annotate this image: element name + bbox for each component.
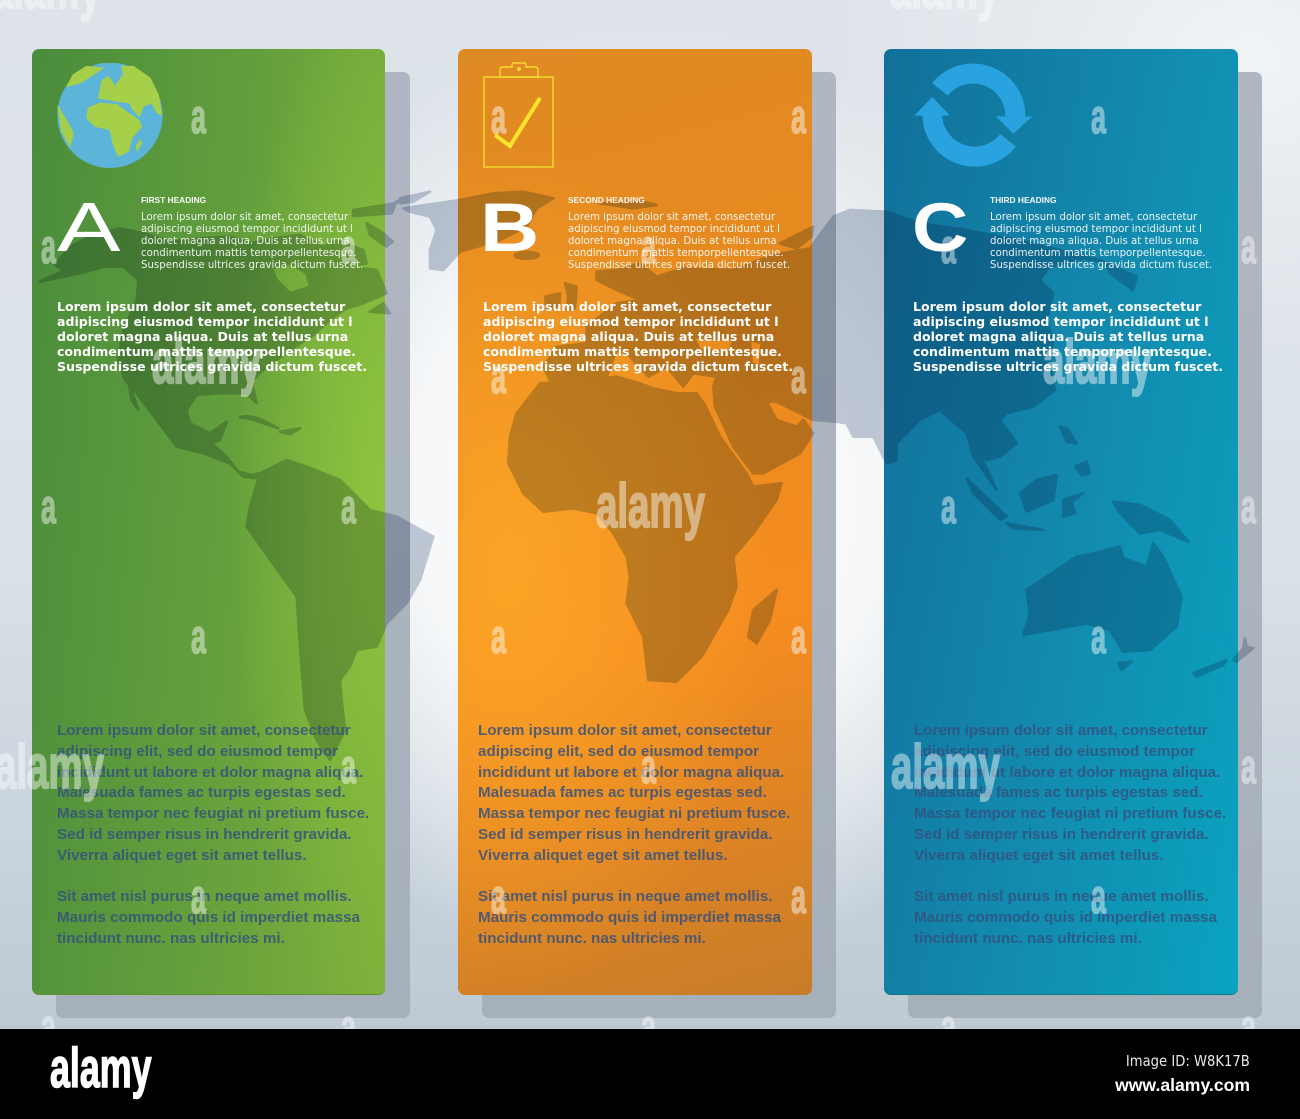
shadow: panel B — [482, 72, 836, 1018]
icon: clipboard with check — [483, 62, 554, 168]
watermarks: a — [791, 351, 806, 404]
watermarks: a — [341, 741, 356, 794]
lower paragraph: incididunt ut labore et dolor magna aliqua. — [914, 764, 1220, 781]
bold paragraph: doloret magna aliqua. Duis at tellus urna — [483, 329, 774, 344]
bold paragraph: adipiscing eiusmod tempor incididunt ut l — [913, 314, 1209, 329]
watermarks: a — [941, 221, 956, 274]
letter B: B — [480, 189, 539, 266]
lower paragraph: Viverra aliquet eget sit amet tellus. — [478, 847, 728, 864]
bold paragraph: Suspendisse ultrices gravida dictum fuscet. — [57, 359, 367, 374]
small paragraph — [568, 212, 790, 271]
lower paragraph: Massa tempor nec feugiat ni pretium fusce. — [914, 805, 1226, 822]
small paragraph: doloret magna aliqua. Duis at tellus urna — [568, 236, 777, 247]
letter A: A — [57, 187, 121, 266]
watermarks: a — [1091, 611, 1106, 664]
lower paragraph: Viverra aliquet eget sit amet tellus. — [57, 847, 307, 864]
small paragraph: condimentum mattis temporpellentesque. — [568, 248, 784, 259]
bold paragraph: Suspendisse ultrices gravida dictum fuscet. — [483, 359, 793, 374]
bold paragraph — [57, 299, 367, 374]
panel: A background — [32, 49, 385, 995]
watermarks: a — [791, 91, 806, 144]
lower paragraph: Mauris commodo quis id imperdiet massa — [478, 909, 781, 926]
lower paragraph: Mauris commodo quis id imperdiet massa — [57, 909, 360, 926]
small paragraph: Suspendisse ultrices gravida dictum fuscet. — [568, 260, 790, 271]
watermarks: a — [491, 611, 506, 664]
watermarks: alamy — [891, 732, 1000, 801]
bold paragraph: Lorem ipsum dolor sit amet, consectetur — [57, 299, 345, 314]
lower paragraph: Sed id semper risus in hendrerit gravida. — [914, 826, 1209, 843]
bold paragraph: adipiscing eiusmod tempor incididunt ut l — [57, 314, 353, 329]
lower paragraph — [478, 722, 790, 947]
second heading: SECOND HEADING — [568, 195, 645, 205]
watermarks: a — [941, 481, 956, 534]
bold paragraph — [913, 299, 1223, 374]
watermarks: a — [341, 221, 356, 274]
icon: refresh arrows — [914, 64, 1032, 167]
bold paragraph: Lorem ipsum dolor sit amet, consectetur — [913, 299, 1201, 314]
small paragraph: Lorem ipsum dolor sit amet, consectetur — [568, 212, 775, 223]
watermarks: a — [791, 611, 806, 664]
watermarks: a — [641, 741, 656, 794]
watermarks: alamy — [152, 327, 261, 396]
panel: B background — [458, 49, 812, 995]
lower paragraph: Malesuada fames ac turpis egestas sed. — [57, 784, 346, 801]
small paragraph: doloret magna aliqua. Duis at tellus urna — [141, 236, 350, 247]
small paragraph — [990, 212, 1212, 271]
lower paragraph: tincidunt nunc. nas ultricies mi. — [478, 930, 706, 947]
small paragraph: Suspendisse ultrices gravida dictum fuscet. — [141, 260, 363, 271]
bold paragraph: doloret magna aliqua. Duis at tellus urna — [57, 329, 348, 344]
watermarks: a — [41, 481, 56, 534]
lower paragraph: Viverra aliquet eget sit amet tellus. — [914, 847, 1164, 864]
watermarks: a — [1241, 221, 1256, 274]
shadow: panel A — [56, 72, 410, 1018]
watermarks: alamy — [596, 471, 705, 540]
bold paragraph: Lorem ipsum dolor sit amet, consectetur — [483, 299, 771, 314]
panel: C background — [884, 49, 1238, 995]
watermarks: a — [491, 351, 506, 404]
bold paragraph: Suspendisse ultrices gravida dictum fuscet. — [913, 359, 1223, 374]
small paragraph: adipiscing eiusmod tempor incididunt ut l — [990, 224, 1202, 235]
letter C: C — [912, 188, 968, 266]
watermarks: a — [341, 481, 356, 534]
small paragraph: Suspendisse ultrices gravida dictum fuscet. — [990, 260, 1212, 271]
panel A content — [57, 63, 369, 947]
panel B content — [478, 62, 793, 947]
lower paragraph: Sed id semper risus in hendrerit gravida. — [478, 826, 773, 843]
panel C content — [912, 64, 1226, 947]
watermarks: a — [1241, 481, 1256, 534]
lower paragraph: adipiscing elit, sed do eiusmod tempor — [478, 743, 759, 760]
bold paragraph: condimentum mattis temporpellentesque. — [913, 344, 1212, 359]
lower paragraph: adipiscing elit, sed do eiusmod tempor — [914, 743, 1195, 760]
small paragraph: Lorem ipsum dolor sit amet, consectetur — [141, 212, 348, 223]
watermarks: a — [1091, 871, 1106, 924]
watermarks: a — [491, 91, 506, 144]
lower paragraph: Sit amet nisl purus in neque amet mollis. — [914, 888, 1209, 905]
bold paragraph — [483, 299, 793, 374]
small paragraph: doloret magna aliqua. Duis at tellus urna — [990, 236, 1199, 247]
website: www.alamy.com — [1115, 1075, 1250, 1095]
small paragraph: adipiscing eiusmod tempor incididunt ut l — [568, 224, 780, 235]
watermarks: a — [191, 91, 206, 144]
lower paragraph: Mauris commodo quis id imperdiet massa — [914, 909, 1217, 926]
lower paragraph: Lorem ipsum dolor sit amet, consectetur — [914, 722, 1208, 739]
lower paragraph — [914, 722, 1226, 947]
watermarks: a — [641, 221, 656, 274]
small paragraph: adipiscing eiusmod tempor incididunt ut l — [141, 224, 353, 235]
watermarks: a — [1241, 741, 1256, 794]
third heading: THIRD HEADING — [990, 195, 1057, 205]
small paragraph: Lorem ipsum dolor sit amet, consectetur — [990, 212, 1197, 223]
lower paragraph: tincidunt nunc. nas ultricies mi. — [57, 930, 285, 947]
lower paragraph — [57, 722, 369, 947]
lower paragraph: Malesuada fames ac turpis egestas sed. — [914, 784, 1203, 801]
bold paragraph: doloret magna aliqua. Duis at tellus urna — [913, 329, 1204, 344]
lower paragraph: Malesuada fames ac turpis egestas sed. — [478, 784, 767, 801]
bold paragraph: condimentum mattis temporpellentesque. — [57, 344, 356, 359]
lower paragraph: incididunt ut labore et dolor magna aliqua. — [478, 764, 784, 781]
watermarks: alamy — [1043, 327, 1152, 396]
lower paragraph: Sed id semper risus in hendrerit gravida. — [57, 826, 352, 843]
bold paragraph: condimentum mattis temporpellentesque. — [483, 344, 782, 359]
lower paragraph: Lorem ipsum dolor sit amet, consectetur — [478, 722, 772, 739]
lower paragraph: Sit amet nisl purus in neque amet mollis. — [57, 888, 352, 905]
lower paragraph: Lorem ipsum dolor sit amet, consectetur — [57, 722, 351, 739]
lower paragraph: tincidunt nunc. nas ultricies mi. — [914, 930, 1142, 947]
footer bar — [0, 1029, 1300, 1119]
icon: globe — [57, 63, 163, 168]
watermarks: a — [1091, 91, 1106, 144]
lower paragraph: Massa tempor nec feugiat ni pretium fusce. — [478, 805, 790, 822]
watermarks: a — [191, 611, 206, 664]
small paragraph: condimentum mattis temporpellentesque. — [141, 248, 357, 259]
lower paragraph: Sit amet nisl purus in neque amet mollis. — [478, 888, 773, 905]
lower paragraph: incididunt ut labore et dolor magna aliqua. — [57, 764, 363, 781]
watermarks: a — [191, 871, 206, 924]
lower paragraph: Massa tempor nec feugiat ni pretium fusce. — [57, 805, 369, 822]
watermarks: a — [791, 871, 806, 924]
small paragraph: condimentum mattis temporpellentesque. — [990, 248, 1206, 259]
lower paragraph: adipiscing elit, sed do eiusmod tempor — [57, 743, 338, 760]
image id: Image ID: W8K17B — [1126, 1052, 1250, 1070]
shadow: panel C — [908, 72, 1262, 1018]
bold paragraph: adipiscing eiusmod tempor incididunt ut l — [483, 314, 779, 329]
watermarks: a — [491, 871, 506, 924]
watermarks: a — [41, 221, 56, 274]
small paragraph — [141, 212, 363, 271]
first heading: FIRST HEADING — [141, 195, 206, 205]
